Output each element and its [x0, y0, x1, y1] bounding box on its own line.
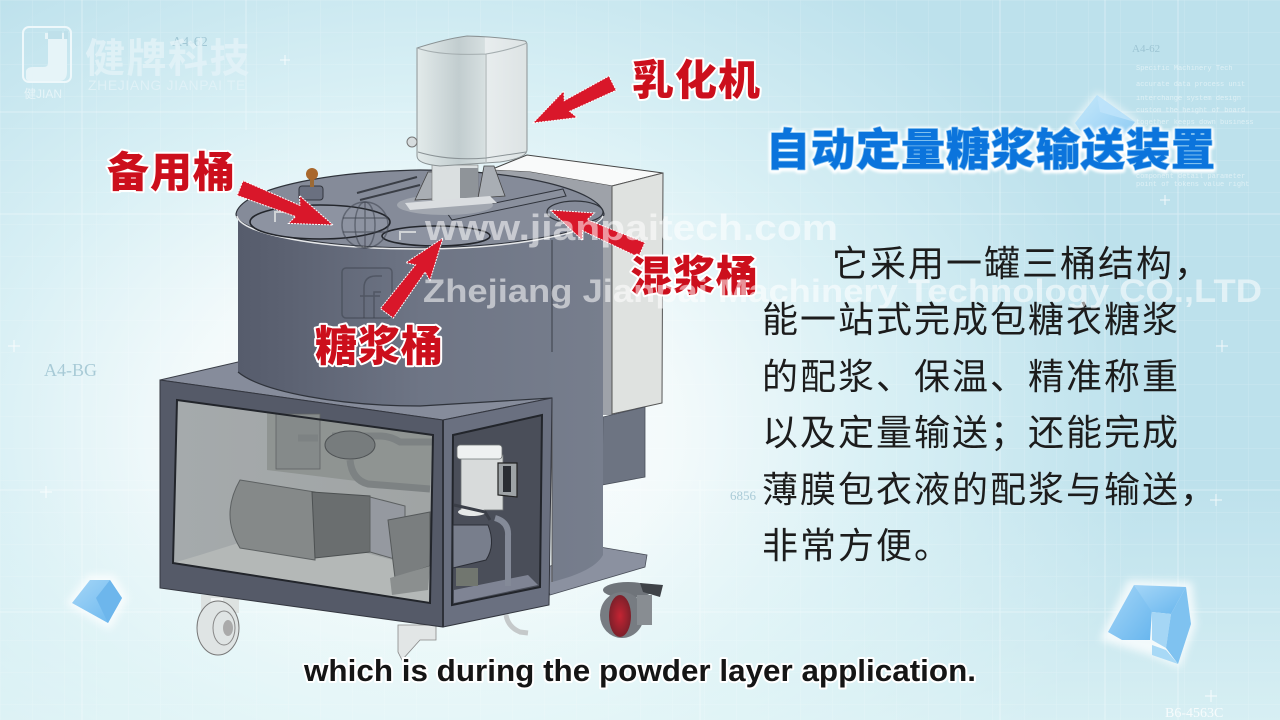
knob on lid — [299, 168, 323, 200]
label: mixing tank: 混浆桶 — [630, 253, 759, 300]
label: emulsifier: 乳化机 — [632, 57, 761, 104]
side motor — [453, 445, 517, 586]
watermark text: Zhejiang Jianpai Machinery Technology CO.,LTD — [423, 273, 1262, 309]
body text: 以及定量输送；还能完成 — [762, 412, 1180, 453]
faint background labels: custom the height of board — [1136, 107, 1245, 115]
body text: 它采用一罐三桶结构， — [832, 243, 1212, 284]
middle caster — [398, 625, 436, 660]
logo wordmark: 健牌科技 — [85, 37, 251, 81]
body text: 能一站式完成包糖衣糖浆 — [762, 299, 1180, 340]
door frame line — [442, 420, 444, 627]
icon: logo mark: 健JIAN — [24, 87, 62, 101]
logo wordmark: ZHEJIANG JIANPAI TE — [88, 77, 246, 93]
tank cylinder — [238, 214, 603, 582]
machine: sugar slurry dosing unit — [160, 36, 663, 660]
side window — [452, 415, 542, 605]
label: spare tank: 备用桶 — [107, 149, 236, 196]
emulsifier motor — [407, 36, 527, 166]
faint background labels: A4-BG — [44, 360, 97, 380]
faint background labels: A4-62 — [172, 35, 208, 50]
emulsifier base — [405, 165, 505, 210]
body text: 非常方便。 — [762, 525, 952, 566]
bottom plate — [540, 547, 647, 595]
arrow: syrup tank — [375, 229, 455, 322]
arrow: spare tank — [235, 174, 339, 239]
faint background labels: 6856 — [730, 488, 756, 503]
front window — [173, 400, 433, 603]
base cabinet — [160, 380, 552, 627]
base cabinet top — [160, 362, 552, 420]
subtitle: which is during the powder layer application. — [303, 653, 976, 688]
faint background labels: together keeps down business — [1136, 119, 1254, 127]
decorative cube: bottom left — [66, 575, 128, 630]
icon: logo mark — [23, 27, 71, 101]
body text: 薄膜包衣液的配浆与输送， — [762, 469, 1218, 510]
faint background labels: Specific Machinery Tech — [1136, 65, 1233, 73]
watermark text — [423, 207, 1262, 309]
drain pipe — [506, 615, 528, 633]
icon: globe — [342, 202, 388, 248]
arrow: mixing tank — [544, 196, 648, 264]
decorative cube: top right — [1070, 92, 1140, 156]
title: 自动定量糖浆输送装置 — [766, 126, 1216, 175]
arrow: emulsifier — [526, 70, 619, 136]
faint background labels: component detail parameter — [1136, 173, 1245, 181]
icon: facebook — [342, 268, 392, 318]
label: syrup tank: 糖浆桶 — [315, 323, 444, 370]
pump motor — [230, 480, 315, 560]
right caster — [600, 582, 663, 638]
faint background labels: A4-62 — [1132, 43, 1160, 55]
tank lid — [236, 170, 604, 249]
left caster — [197, 595, 239, 655]
logo: Jianpai — [23, 27, 251, 101]
faint background labels: accurate data process unit — [1136, 81, 1245, 89]
title: 自动定量糖浆输送装置 — [766, 127, 1216, 176]
watermark text: www.jianpaitech.com — [424, 207, 838, 248]
faint background labels: interchange system design — [1136, 95, 1241, 103]
faint background labels: point of tokens value right — [1136, 181, 1249, 189]
decorative cube: bottom right — [1100, 580, 1196, 668]
pipework — [276, 414, 320, 469]
body text: 的配浆、保温、精准称重 — [762, 356, 1180, 397]
body text — [762, 243, 1218, 566]
control box — [490, 155, 663, 485]
watermark icons — [342, 202, 392, 318]
